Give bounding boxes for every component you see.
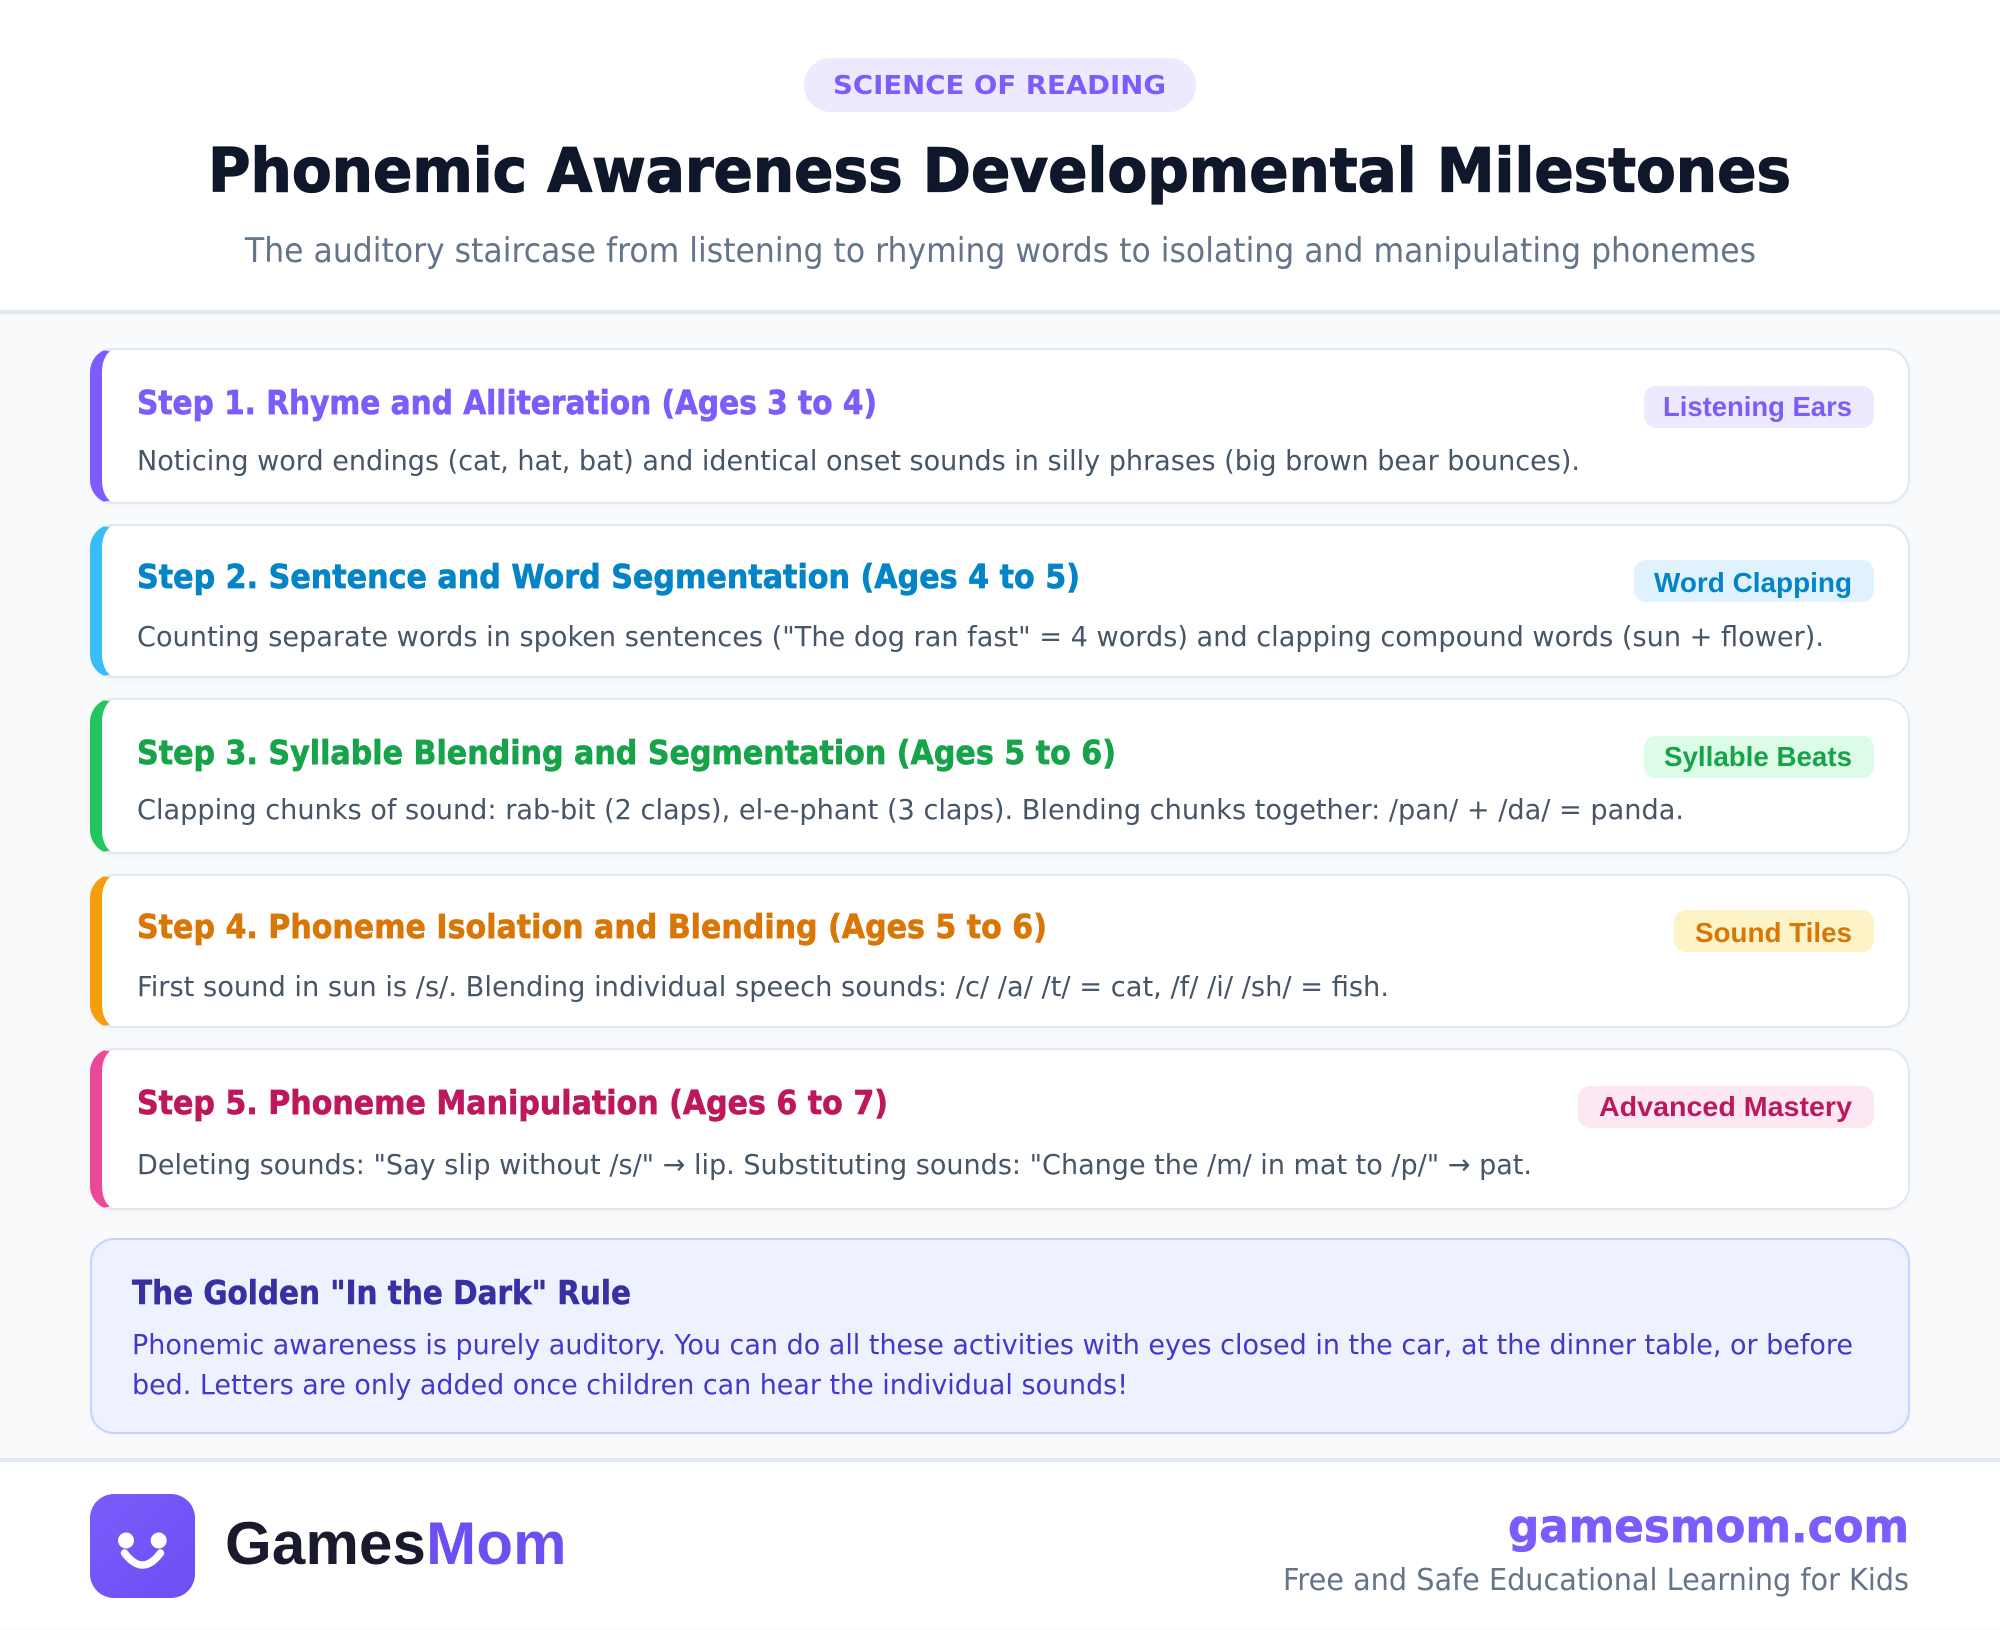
- step 1 badge: [1644, 386, 1874, 428]
- step 1 description: Noticing word endings (cat, hat, bat) and identical onset sounds in silly phrases (big brown bear bounces).: [137, 444, 1580, 477]
- callout heading: The Golden "In the Dark" Rule: [132, 1273, 631, 1312]
- panel: step 5: [90, 1048, 1910, 1210]
- step 1 badge: Listening Ears: [1663, 391, 1852, 422]
- brand wordmark: GamesMom: [225, 1510, 567, 1577]
- step 4 badge: [1674, 910, 1874, 952]
- eyebrow pill: [804, 58, 1196, 112]
- eyebrow pill: SCIENCE OF READING: [833, 71, 1166, 101]
- panel: step 2: [90, 524, 1910, 678]
- step 3 badge: [1644, 736, 1874, 778]
- step 5 description: Deleting sounds: "Say slip without /s/" → lip. Substituting sounds: "Change the /m/ in mat to /p/" → pat.: [137, 1148, 1532, 1181]
- callout body: [132, 1328, 1853, 1401]
- website url: gamesmom.com: [1508, 1500, 1909, 1553]
- step 5 badge: [1578, 1086, 1874, 1128]
- step 2 heading: Step 2. Sentence and Word Segmentation (Ages 4 to 5): [137, 557, 1080, 596]
- step 5 badge: Advanced Mastery: [1599, 1091, 1853, 1122]
- step 4 description: First sound in sun is /s/. Blending individual speech sounds: /c/ /a/ /t/ = cat, /f/ /i/ /sh/ = fish.: [137, 970, 1389, 1003]
- panel: step 3: [90, 698, 1910, 854]
- step 2 badge: Word Clapping: [1654, 567, 1852, 598]
- step 1 heading: Step 1. Rhyme and Alliteration (Ages 3 to 4): [137, 383, 877, 422]
- callout body: Phonemic awareness is purely auditory. You can do all these activities with eyes closed in the car, at the dinner table, or before: [132, 1328, 1853, 1361]
- header: [0, 0, 2000, 314]
- callout body: bed. Letters are only added once children can hear the individual sounds!: [132, 1368, 1128, 1401]
- callout: golden rule: [90, 1238, 1910, 1434]
- step 3 badge: Syllable Beats: [1664, 741, 1852, 772]
- icon: smiley logo: [90, 1494, 195, 1598]
- step 3 heading: Step 3. Syllable Blending and Segmentation (Ages 5 to 6): [137, 733, 1116, 772]
- panel: step 1: [90, 348, 1910, 504]
- footer: [0, 1458, 2000, 1628]
- tagline: Free and Safe Educational Learning for Kids: [1283, 1563, 1909, 1598]
- title: Phonemic Awareness Developmental Milestones: [208, 136, 1791, 206]
- step 4 badge: Sound Tiles: [1695, 917, 1852, 948]
- step 3 description: Clapping chunks of sound: rab-bit (2 claps), el-e-phant (3 claps). Blending chunks together: /pan/ + /da/ = panda.: [137, 793, 1684, 826]
- step 5 heading: Step 5. Phoneme Manipulation (Ages 6 to 7): [137, 1083, 888, 1122]
- subtitle: The auditory staircase from listening to rhyming words to isolating and manipulating phonemes: [244, 231, 1756, 270]
- step 4 heading: Step 4. Phoneme Isolation and Blending (Ages 5 to 6): [137, 907, 1047, 946]
- step 2 description: Counting separate words in spoken sentences ("The dog ran fast" = 4 words) and clapping compound words (sun + flower).: [137, 620, 1824, 653]
- step 2 badge: [1634, 560, 1874, 602]
- panel: step 4: [90, 874, 1910, 1028]
